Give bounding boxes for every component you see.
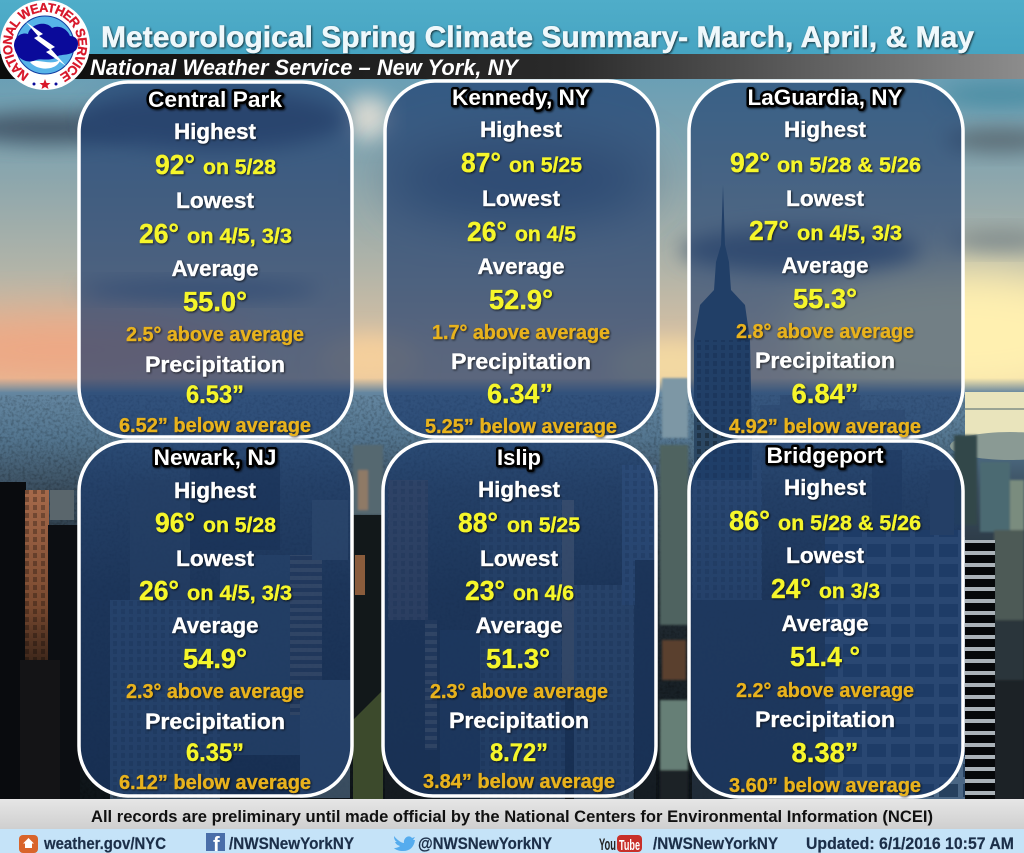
lowest label: Lowest — [176, 546, 255, 571]
icon: Facebook — [206, 833, 225, 853]
disclaimer bar: All records are preliminary until made official by the National Centers for Environmental Information (NCEI) — [91, 807, 933, 826]
lowest label: Lowest — [786, 543, 865, 568]
footer bar — [0, 829, 1024, 853]
precipitation label: Precipitation — [451, 349, 591, 374]
highest value: 88° — [458, 507, 498, 538]
highest value: on 5/28 — [203, 514, 276, 537]
station name: Central Park — [148, 87, 283, 112]
highest value: on 5/28 — [203, 156, 276, 179]
lowest value: on 4/6 — [513, 582, 574, 605]
highest value: on 5/28 & 5/26 — [778, 512, 921, 535]
highest label: Highest — [174, 119, 256, 144]
average label: Average — [478, 254, 564, 279]
precipitation departure: 4.92” below average — [729, 416, 921, 438]
highest value — [458, 507, 580, 538]
average label: Average — [782, 611, 868, 636]
precipitation departure: 6.12” below average — [119, 772, 311, 794]
lowest value — [749, 215, 902, 246]
panel: Central Park — [79, 82, 352, 437]
panel: Newark, NJ — [79, 441, 352, 796]
title: Meteorological Spring Climate Summary- March, April, & May — [101, 21, 975, 54]
Facebook handle: /NWSNewYorkNY — [229, 835, 354, 853]
average label: Average — [476, 613, 562, 638]
average value: 51.4 ° — [790, 641, 860, 672]
panel: LaGuardia, NY — [689, 81, 963, 438]
lowest value: 23° — [465, 575, 505, 606]
precipitation label: Precipitation — [145, 352, 285, 377]
precipitation departure: 6.52” below average — [119, 415, 311, 437]
YouTube handle: /NWSNewYorkNY — [653, 835, 778, 853]
lowest value: on 4/5, 3/3 — [187, 225, 292, 248]
Twitter handle: @NWSNewYorkNY — [418, 835, 552, 853]
precipitation departure: 5.25” below average — [425, 416, 617, 438]
lowest value: on 4/5, 3/3 — [187, 582, 292, 605]
station name: Kennedy, NY — [452, 85, 590, 110]
highest value — [155, 507, 276, 538]
lowest label: Lowest — [176, 188, 255, 213]
lowest value: 27° — [749, 215, 789, 246]
Empire State Building — [694, 185, 752, 480]
average value: 51.3° — [486, 643, 550, 674]
average label: Average — [172, 256, 258, 281]
highest label: Highest — [784, 117, 866, 142]
highest value — [730, 147, 921, 178]
temperature departure: 2.5° above average — [126, 324, 304, 346]
highest value — [155, 149, 276, 180]
buildings behind panels — [110, 450, 902, 800]
precipitation label: Precipitation — [145, 709, 285, 734]
highest value — [729, 505, 921, 536]
station name: LaGuardia, NY — [748, 85, 903, 110]
precipitation value: 6.34” — [487, 378, 553, 409]
lowest value: 24° — [771, 573, 811, 604]
icon: National Weather Service logo: NATIONAL WEATHER SERVICE — [2, 2, 88, 82]
lowest value: 26° — [139, 218, 179, 249]
precipitation value: 6.84” — [792, 378, 858, 409]
distant towers — [353, 378, 1024, 800]
icon: Twitter bird — [394, 836, 415, 851]
lowest value — [771, 573, 880, 604]
average value: 55.3° — [793, 283, 857, 314]
lowest label: Lowest — [786, 186, 865, 211]
temperature departure: 2.2° above average — [736, 680, 914, 702]
background: city skyline and harbor — [0, 185, 1024, 800]
panel: Kennedy, NY — [385, 81, 658, 438]
subtitle: National Weather Service – New York, NY — [90, 55, 520, 80]
highest value: on 5/28 & 5/26 — [777, 154, 921, 177]
highest value: on 5/25 — [509, 154, 582, 177]
station name: Islip — [497, 445, 541, 470]
lowest label: Lowest — [480, 546, 559, 571]
lowest value — [467, 216, 576, 247]
disclaimer bar — [0, 799, 1024, 829]
temperature departure: 2.8° above average — [736, 321, 914, 343]
station name: Newark, NJ — [154, 445, 276, 470]
precipitation label: Precipitation — [755, 707, 895, 732]
distant skyline behind Laguardia — [760, 395, 905, 438]
subtitle band — [0, 54, 1024, 79]
precipitation departure: 3.84” below average — [423, 771, 615, 793]
temperature departure: 2.3° above average — [126, 681, 304, 703]
precipitation value: 8.72” — [490, 739, 548, 767]
gap towers — [353, 515, 383, 800]
website link: weather.gov/NYC — [43, 835, 166, 853]
precipitation label: Precipitation — [755, 348, 895, 373]
lowest label: Lowest — [482, 186, 561, 211]
highest value: on 5/25 — [507, 514, 580, 537]
average value: 52.9° — [489, 284, 553, 315]
left dark tower — [0, 482, 26, 800]
panel: Bridgeport — [689, 441, 963, 797]
lowest value: 26° — [139, 575, 179, 606]
highest value: 87° — [461, 147, 501, 178]
precipitation departure: 3.60” below average — [729, 775, 921, 797]
highest value: 86° — [729, 505, 770, 536]
average value: 54.9° — [183, 643, 247, 674]
highest value: 96° — [155, 507, 195, 538]
background: sunset sky — [0, 79, 1024, 405]
temperature departure: 1.7° above average — [432, 322, 610, 344]
lowest value — [139, 575, 292, 606]
lowest value — [465, 575, 574, 606]
film grain — [0, 395, 965, 800]
lowest value: on 4/5, 3/3 — [797, 222, 902, 245]
highest label: Highest — [784, 475, 866, 500]
temperature departure: 2.3° above average — [430, 681, 608, 703]
lowest value — [139, 218, 292, 249]
header band — [0, 0, 1024, 55]
precipitation label: Precipitation — [449, 708, 589, 733]
precipitation value: 6.35” — [186, 739, 244, 767]
updated timestamp: Updated: 6/1/2016 10:57 AM — [806, 835, 1014, 853]
highest label: Highest — [480, 117, 562, 142]
highest label: Highest — [478, 477, 560, 502]
lowest value: on 3/3 — [819, 580, 880, 603]
station name: Bridgeport — [766, 443, 884, 468]
average label: Average — [782, 253, 868, 278]
precipitation value: 8.38” — [792, 737, 858, 768]
average label: Average — [172, 613, 258, 638]
lowest value: on 4/5 — [515, 223, 576, 246]
icon: home — [19, 835, 38, 853]
lowest value: 26° — [467, 216, 507, 247]
highest label: Highest — [174, 478, 256, 503]
highest value — [461, 147, 582, 178]
highest value: 92° — [730, 147, 770, 178]
precipitation value: 6.53” — [186, 381, 244, 409]
panel: Islip — [383, 441, 656, 796]
average value: 55.0° — [183, 286, 247, 317]
highest value: 92° — [155, 149, 195, 180]
